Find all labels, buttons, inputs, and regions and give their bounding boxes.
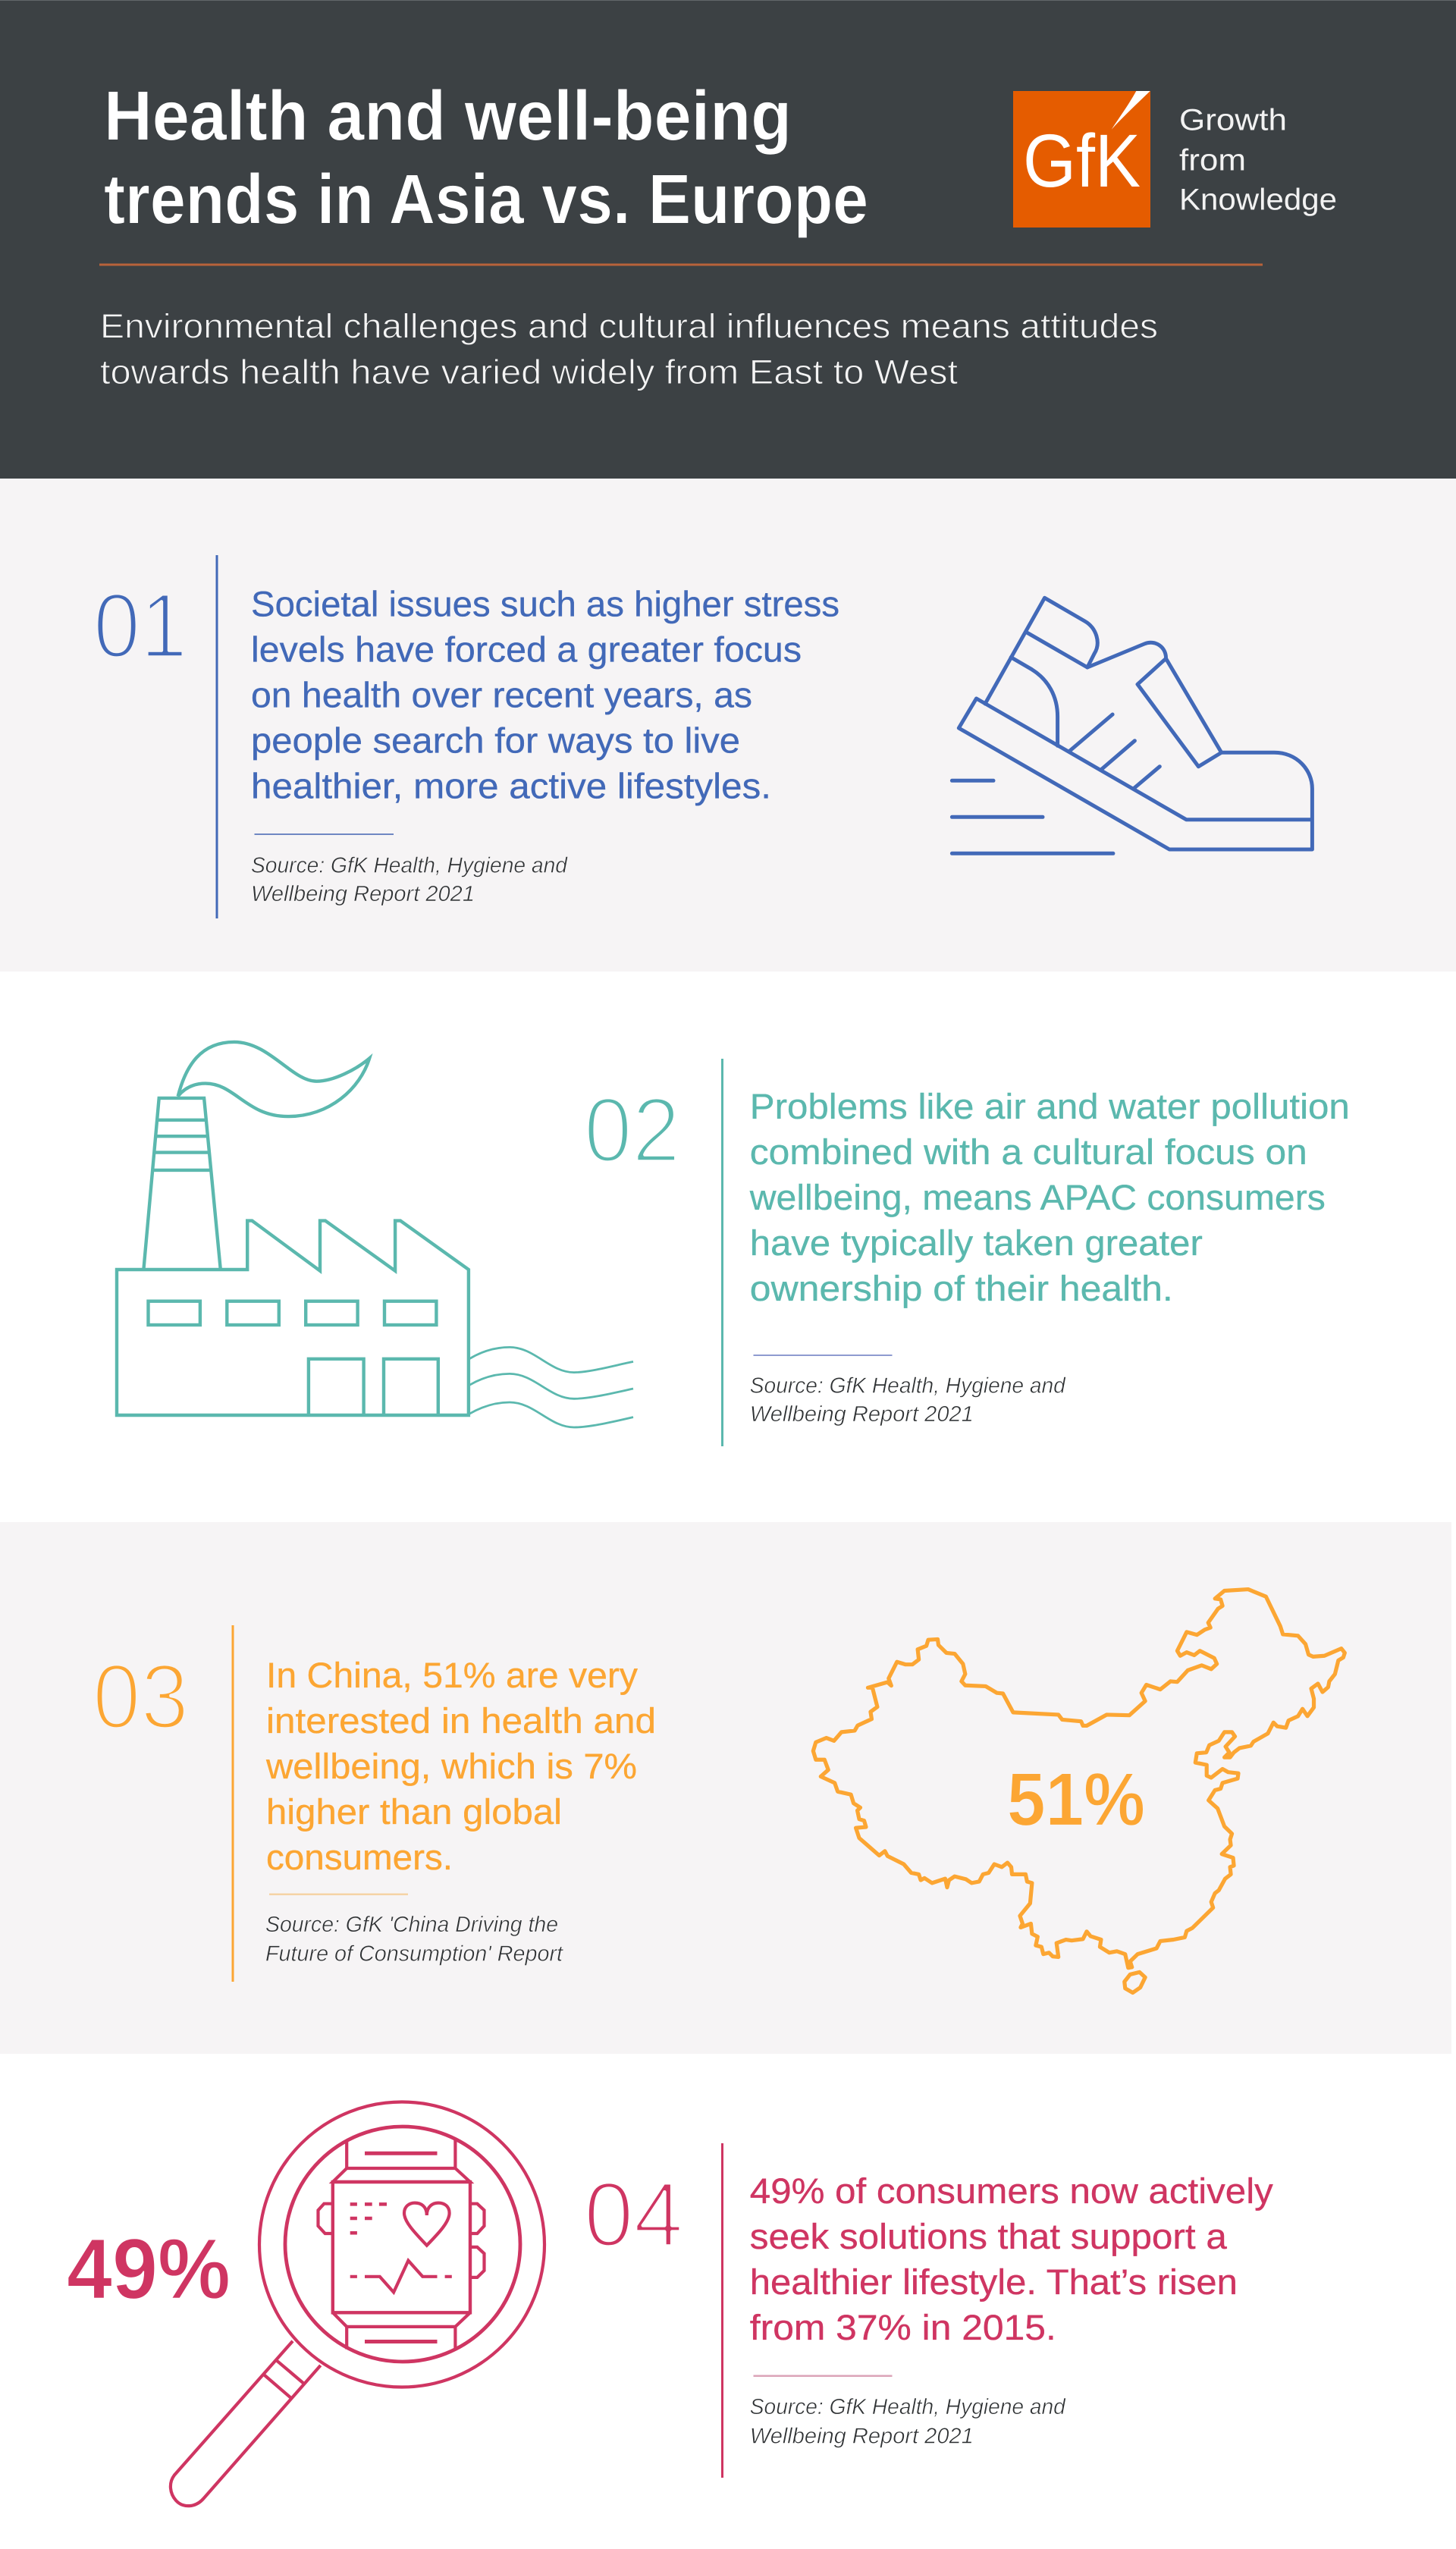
number 03: 03	[93, 1644, 189, 1747]
text block 04: from 37% in 2015.	[750, 2307, 1056, 2347]
tagline: Growth from Knowledge: Growth	[1179, 103, 1287, 137]
text block 03: In China, 51% are very	[266, 1655, 639, 1695]
tagline: Growth from Knowledge: Knowledge	[1179, 184, 1337, 217]
source 02: Wellbeing Report 2021	[750, 1402, 974, 1427]
text block 03: consumers.	[266, 1837, 453, 1877]
text block 03: interested in health and	[266, 1700, 656, 1741]
text block 02: have typically taken greater	[750, 1223, 1203, 1263]
source 01	[251, 854, 568, 906]
text block 01: Societal issues such as higher stress	[251, 584, 839, 624]
text block 04: 49% of consumers now actively	[750, 2171, 1273, 2211]
subtitle: towards health have varied widely from East to West	[100, 353, 958, 391]
panel: 03 China	[0, 1522, 1451, 2054]
icon: magnifier with smartwatch	[171, 2102, 544, 2506]
panel: header	[0, 0, 1456, 479]
source 02: Source: GfK Health, Hygiene and	[750, 1374, 1066, 1398]
icon: map of China	[813, 1590, 1345, 1993]
panel: 01 societal issues	[0, 479, 1456, 972]
source 01: Source: GfK Health, Hygiene and	[251, 854, 568, 878]
title: trends in Asia vs. Europe	[104, 159, 868, 238]
text block 03: wellbeing, which is 7%	[265, 1746, 637, 1786]
text block 02: Problems like air and water pollution	[750, 1086, 1350, 1126]
text block 04	[750, 2171, 1273, 2347]
source 03: Source: GfK 'China Driving the	[265, 1913, 558, 1937]
tagline: Growth from Knowledge	[1179, 103, 1337, 217]
subtitle	[100, 307, 1158, 391]
text block 01: on health over recent years, as	[251, 675, 752, 715]
source 02	[750, 1374, 1066, 1427]
text block 01: levels have forced a greater focus	[251, 629, 802, 670]
text block 01: people search for ways to live	[251, 720, 740, 761]
panel: 04 solutions	[0, 2054, 1456, 2549]
text block 02	[749, 1086, 1350, 1308]
text block 02: ownership of their health.	[750, 1268, 1173, 1308]
source 03: Future of Consumption' Report	[265, 1942, 564, 1967]
stat: 51%: 51%	[1007, 1756, 1145, 1841]
source 01: Wellbeing Report 2021	[251, 882, 475, 906]
subtitle: Environmental challenges and cultural influences means attitudes	[100, 307, 1158, 346]
number 02: 02	[584, 1078, 680, 1182]
title	[104, 76, 868, 238]
text block 03: higher than global	[266, 1791, 562, 1832]
title: Health and well-being	[104, 76, 792, 155]
tagline: Growth from Knowledge: from	[1179, 143, 1246, 177]
stat: 49%: 49%	[67, 2221, 231, 2317]
logo: GfK	[1013, 91, 1150, 228]
source 04: Wellbeing Report 2021	[750, 2425, 974, 2449]
text block 02: combined with a cultural focus on	[750, 1132, 1307, 1172]
source 04	[750, 2395, 1066, 2449]
number 04: 04	[584, 2163, 683, 2266]
text block 02: wellbeing, means APAC consumers	[749, 1177, 1326, 1217]
source 03	[265, 1913, 564, 1967]
icon: factory	[117, 1042, 633, 1427]
text block 04: healthier lifestyle. That’s risen	[750, 2262, 1238, 2302]
source 04: Source: GfK Health, Hygiene and	[750, 2395, 1066, 2419]
text block 01: healthier, more active lifestyles.	[251, 766, 771, 806]
number 01: 01	[93, 573, 187, 676]
text block 03	[265, 1655, 656, 1877]
panel: 02 pollution	[0, 972, 1456, 1522]
icon: running shoe	[952, 598, 1312, 853]
text block 01	[251, 584, 839, 806]
text block 04: seek solutions that support a	[750, 2216, 1228, 2256]
logo: GfK: GfK	[1023, 118, 1141, 202]
smartwatch	[318, 2139, 484, 2350]
